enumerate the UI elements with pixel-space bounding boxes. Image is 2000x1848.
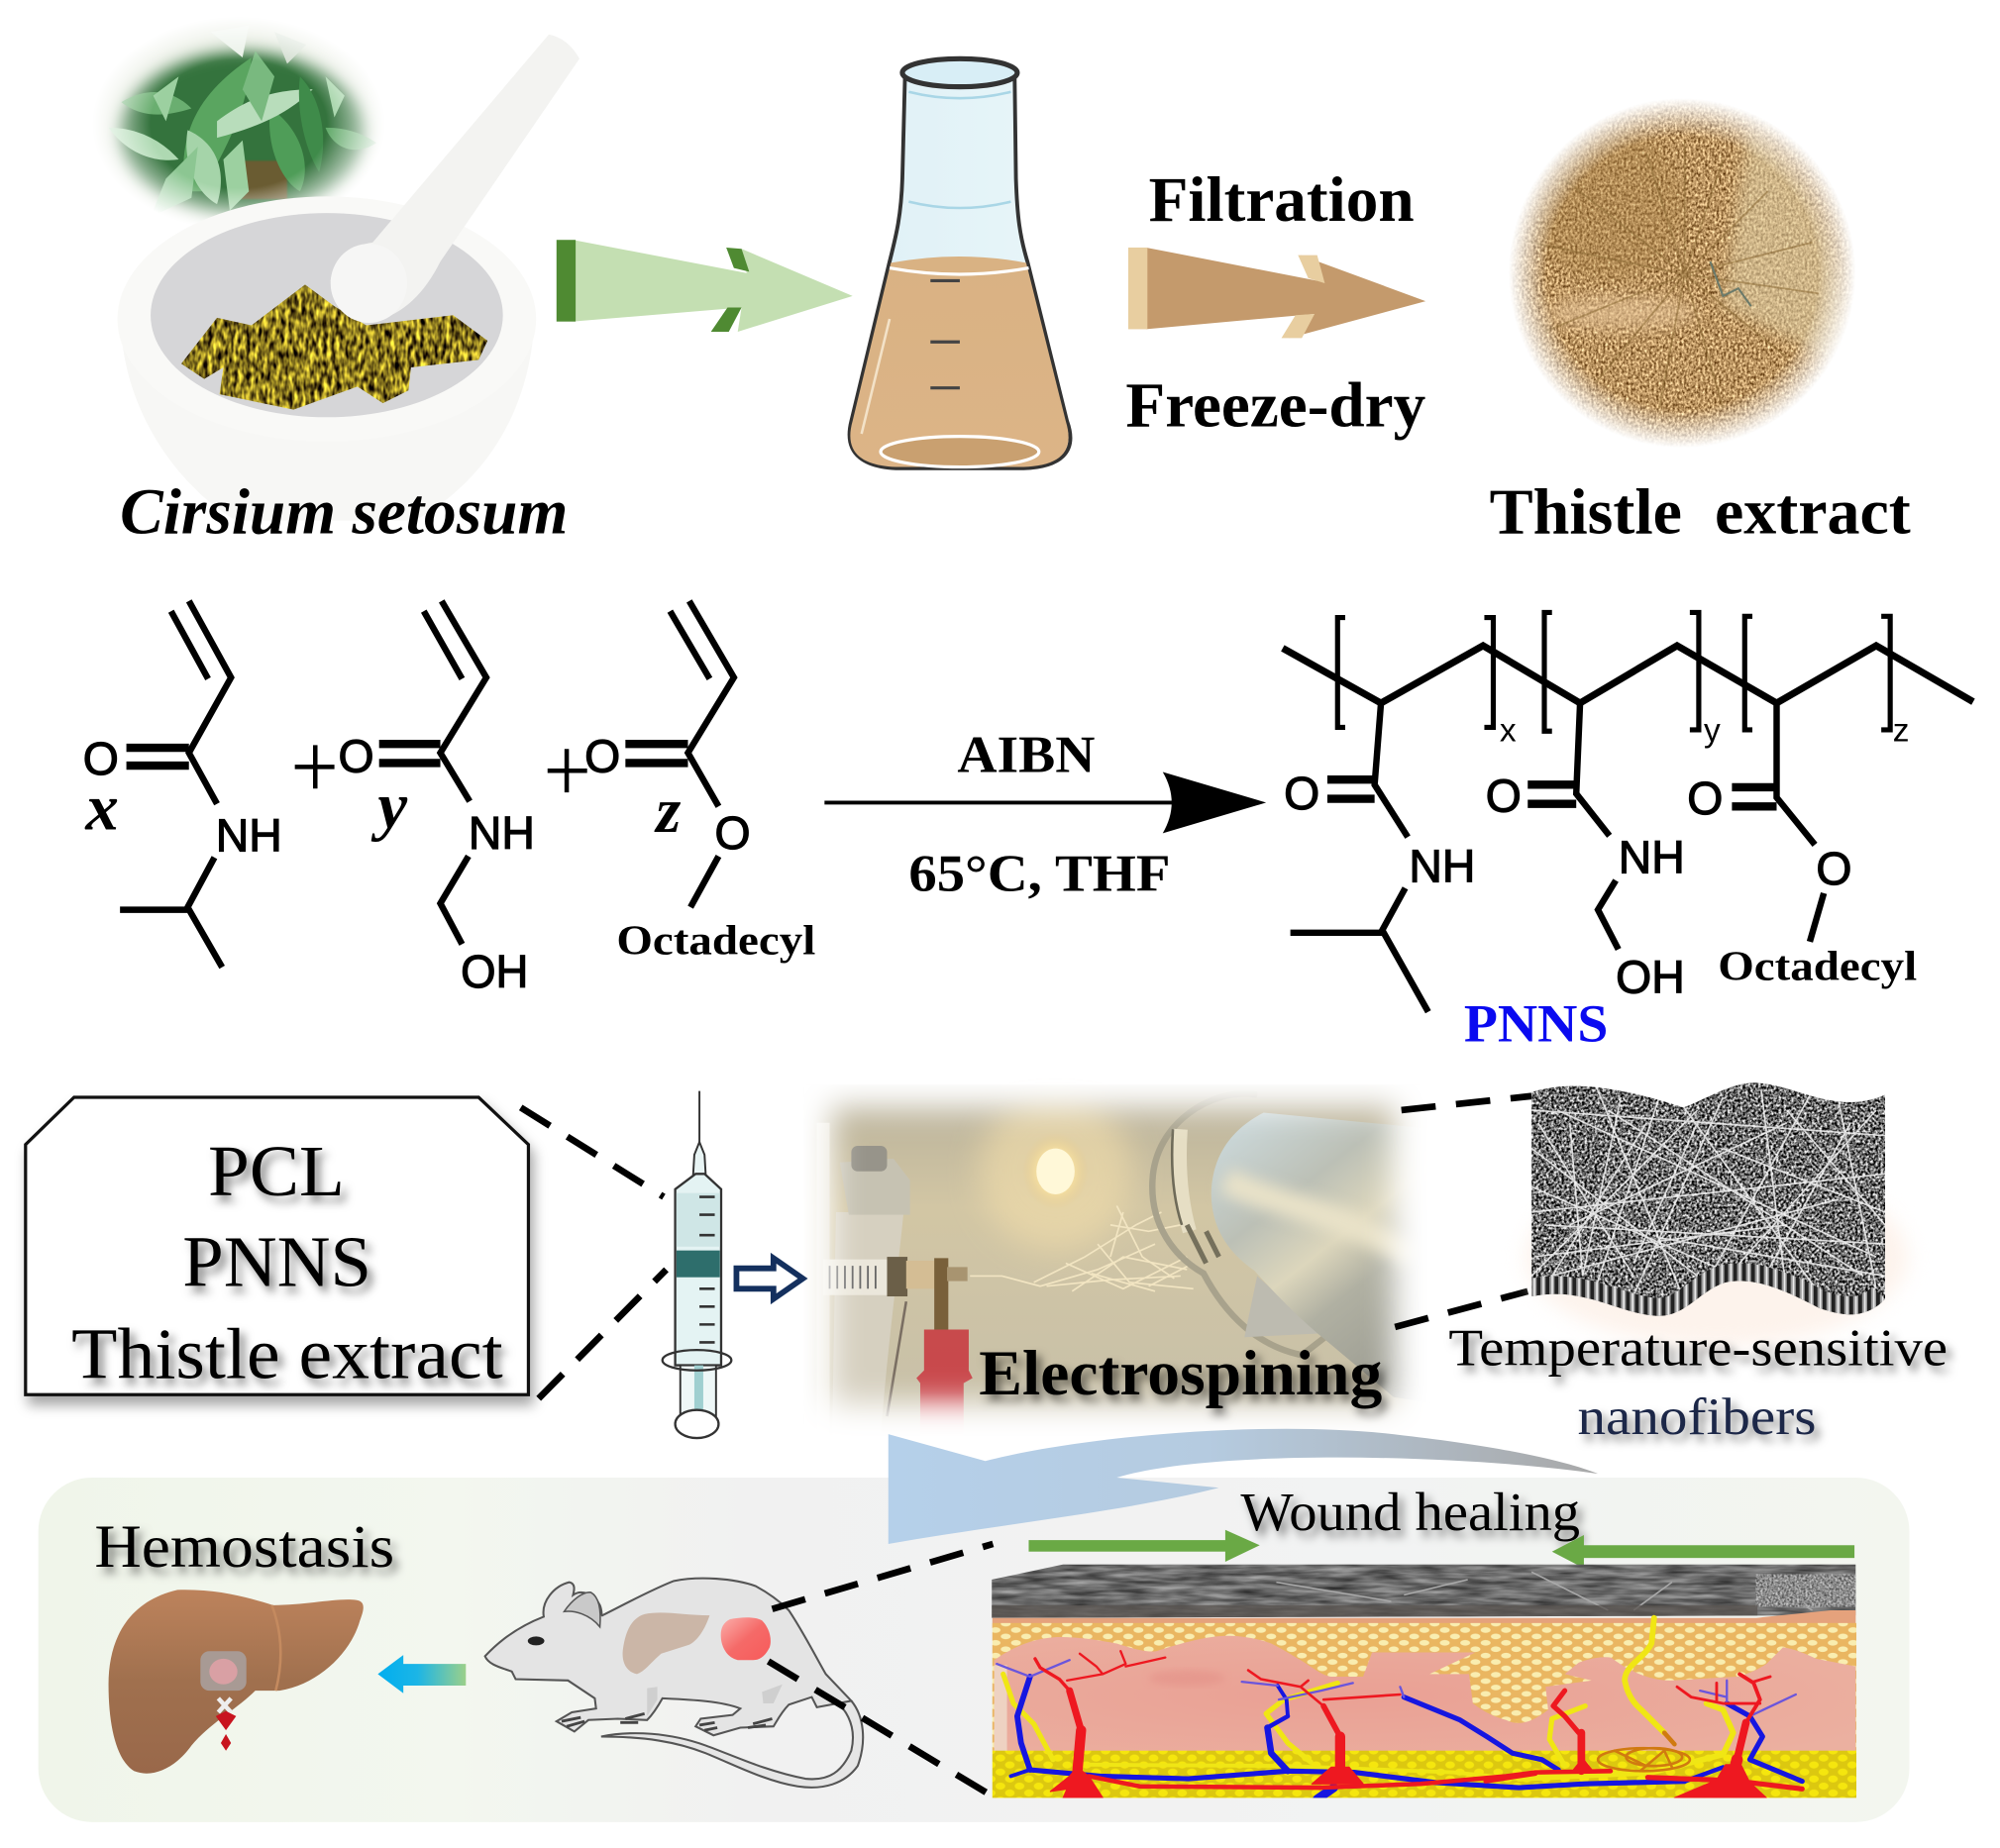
chemical structure: monomer y: NH [469,807,535,859]
red arteries [1035,1651,1802,1789]
subcutaneous fat layer [992,1751,1857,1799]
label: Cirsium setosum: Cirsium setosum [120,476,568,549]
chemical structure: monomer x: x [84,770,119,844]
chemical structure: monomer x: O [83,733,119,784]
panel: application background [39,1478,1909,1822]
panel: spinning solution box [26,1097,528,1394]
blue veins [1010,1677,1802,1799]
icon: pestle [331,35,579,323]
mouse tail [601,1699,863,1788]
label: Thistle extract: Thistle extract [1490,476,1911,549]
arrow: green process arrow [557,240,853,332]
mounted syringe [830,1260,888,1295]
arrow: green wound closure left [1552,1535,1854,1568]
heading: Filtration: Filtration [1149,164,1415,235]
side chain two: OH [1616,951,1685,1002]
chemical structure: monomer y [338,601,535,997]
subscripts: x [1500,713,1517,750]
side chain two [1486,703,1685,1002]
label: temperature-sensitive nanofibers: nanofibers [1578,1388,1816,1446]
mouse eye [528,1636,545,1645]
label: temperature-sensitive nanofibers: Temperature-sensitive [1448,1320,1947,1378]
box outline [26,1097,528,1394]
label: AIBN: AIBN [957,726,1095,783]
heading: Freeze-dry: Freeze-dry [1125,369,1425,440]
chemical structure: monomer z: O [584,730,620,781]
side chain three: O [1816,843,1852,894]
chemical structure: monomer y: OH [461,946,528,997]
icon: mouse [485,1579,863,1788]
label: Hemostasis: Hemostasis [94,1513,394,1581]
icon: conical flask with extract [850,58,1071,468]
side chain two: NH [1619,831,1685,882]
lamp glow [979,1092,1132,1251]
clamp stand [819,1123,830,1400]
nanofiber mat lower edge [1531,1281,1885,1316]
orange nerve coil [1598,1733,1690,1771]
epidermis strip [993,1610,1856,1628]
chemical structure: monomer z [584,601,816,965]
image: electrospinning apparatus photo [804,1084,1435,1435]
fibre jet [970,1206,1194,1291]
illustration: skin wound cross-section [992,1565,1857,1799]
arrow: brown process arrow [1128,248,1425,338]
subscripts [1500,713,1909,750]
image: thistle extract texture [1506,97,1863,455]
yellow nerves [1003,1618,1734,1779]
mouse ear [565,1592,600,1627]
collector drum [1211,1113,1408,1398]
arrow: polymerization reaction [824,726,1266,902]
side chain three: O [1687,772,1723,824]
mouse leg shading [647,1685,783,1716]
panel: herb preparation [89,13,579,549]
dermis [995,1636,1855,1756]
polymer brackets [1337,612,1890,731]
side chain two: O [1486,770,1522,821]
icon: liver with patch [109,1590,364,1774]
label: Electrospining: Electrospining [979,1338,1382,1408]
mouse feet [562,1713,773,1730]
callout lines: mouse to skin [769,1544,993,1797]
image: nanofiber mat [1526,1072,1908,1346]
text: solution components: PNNS [182,1222,371,1302]
symbol: plus [295,745,335,788]
icon: ground herb pile [178,280,491,413]
label: Wound healing: Wound healing [1240,1482,1580,1542]
label: PNNS: PNNS [1464,993,1608,1053]
chemical structure: monomer z: O [715,807,751,859]
icon: thistle plant photo [104,26,376,221]
label: reaction conditions: 65°C, THF [908,845,1171,902]
arrow: curved blue application arrow [889,1429,1598,1544]
chemical structure: monomer z: z [654,775,681,846]
mouse liver [623,1612,709,1674]
chemical structure: monomer x [83,601,282,968]
arrow: green wound closure right [1028,1530,1260,1562]
collector frame [1152,1093,1330,1355]
side chain three: Octadecyl [1718,943,1917,989]
side chain three [1687,703,1917,989]
blood vessels and nerves [997,1618,1802,1799]
subscripts: y [1704,713,1721,750]
side chain one: NH [1409,840,1475,891]
epidermal cell layer [992,1623,1857,1751]
panel: thistle extract [1490,97,1911,549]
side chain one [1284,703,1475,1012]
text: solution components [71,1131,503,1393]
polymer backbone [1283,646,1973,703]
nanofiber dressing slab [992,1565,1857,1618]
subscripts: z [1893,713,1909,750]
icon: mortar bowl [118,196,536,521]
text: solution components: Thistle extract [71,1313,503,1393]
side chain one: O [1284,768,1319,819]
text: solution components: PCL [208,1131,345,1211]
chemical structure: monomer y: O [338,730,374,781]
callout lines: box to syringe [521,1107,667,1398]
icon: syringe [663,1091,731,1438]
callout lines: photo to nanofibers [1395,1096,1531,1327]
symbol: plus [548,749,587,792]
arrow: cyan hemostasis arrow [377,1655,466,1694]
red electrode clip [916,1329,973,1420]
mouse body [485,1579,851,1735]
chemical structure: monomer y: y [370,770,407,843]
chemical structure: monomer x: NH [216,809,282,861]
label: temperature-sensitive nanofibers [1448,1320,1947,1446]
mouse wound patch [721,1617,771,1660]
chemical structure: monomer z: Octadecyl [616,918,816,965]
chemical structure: PNNS polymer [1283,612,1973,1053]
arrow: hollow navy arrow [736,1258,802,1299]
